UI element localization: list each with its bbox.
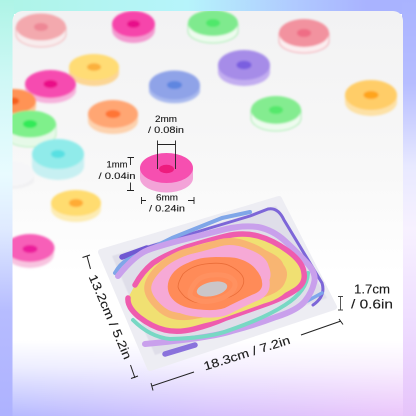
dimension: box height 13.2cm bbox=[82, 255, 138, 378]
dimension: box depth 1.7cm bbox=[338, 282, 393, 312]
label: 0.6in: / 0.6in bbox=[351, 298, 393, 312]
dimension: thickness 1mm bbox=[98, 158, 136, 190]
label: 1mm: 1mm bbox=[106, 160, 128, 170]
label: 0.08in: / 0.08in bbox=[148, 125, 184, 136]
dimension: diameter 6mm bbox=[142, 192, 194, 214]
bead: pink top right bbox=[279, 19, 329, 53]
strand: outer purple bbox=[148, 209, 323, 305]
strand loops bbox=[115, 209, 323, 354]
strand: blue bbox=[115, 212, 250, 273]
strand: purple stub bottom bbox=[165, 345, 195, 354]
scattered beads bbox=[0, 10, 397, 268]
strand: light orange bbox=[148, 242, 274, 317]
label: 6mm: 6mm bbox=[156, 192, 178, 204]
bead: magenta top bbox=[112, 11, 155, 43]
bead: translucent white bbox=[0, 162, 34, 189]
bead: orange edge bbox=[12, 88, 38, 116]
dimension: box width 18.3cm bbox=[151, 319, 343, 390]
bead: yellow bbox=[69, 54, 119, 86]
strand: purple stub top bbox=[122, 248, 147, 257]
bead: amber right bbox=[345, 80, 397, 116]
bead: green left bbox=[4, 110, 56, 147]
bead: magenta left bbox=[25, 70, 76, 103]
bead: pale pink bbox=[16, 14, 66, 47]
bead: green middle bbox=[251, 96, 301, 131]
strand: blue corner bbox=[307, 291, 324, 303]
storage box with strand loops bbox=[101, 199, 334, 368]
label: 0.24in: / 0.24in bbox=[149, 204, 185, 214]
bead: purple bbox=[218, 50, 270, 86]
bead: centre measured magenta bbox=[140, 153, 193, 192]
bead: magenta lower left bbox=[6, 234, 54, 268]
label: 0.04in: / 0.04in bbox=[98, 171, 136, 182]
strand: orange inner bbox=[190, 296, 230, 304]
label: 13.2cm / 5.2in: 13.2cm / 5.2in bbox=[86, 272, 135, 361]
label: 2mm: 2mm bbox=[155, 114, 177, 125]
strand: orange separator bbox=[178, 263, 244, 303]
strand: yellow bbox=[144, 242, 290, 323]
strand: pink bbox=[164, 253, 266, 314]
strand: orange outer bbox=[188, 257, 222, 310]
bead: green top bbox=[188, 10, 238, 43]
strand: magenta bbox=[128, 234, 304, 331]
bead: blue bbox=[149, 70, 200, 103]
dimension: hole 2mm bbox=[148, 114, 184, 169]
strand: lilac bbox=[118, 226, 315, 344]
box body bbox=[101, 199, 334, 368]
bead: cyan bbox=[32, 139, 84, 180]
bead: yellow lower bbox=[51, 190, 101, 222]
gray centre bbox=[196, 281, 228, 297]
label: 18.3cm / 7.2in: 18.3cm / 7.2in bbox=[202, 333, 292, 373]
label: 1.7cm: 1.7cm bbox=[354, 282, 390, 296]
bead: orange bbox=[88, 100, 138, 134]
box floor bbox=[112, 206, 327, 355]
strand: teal bbox=[133, 273, 308, 339]
